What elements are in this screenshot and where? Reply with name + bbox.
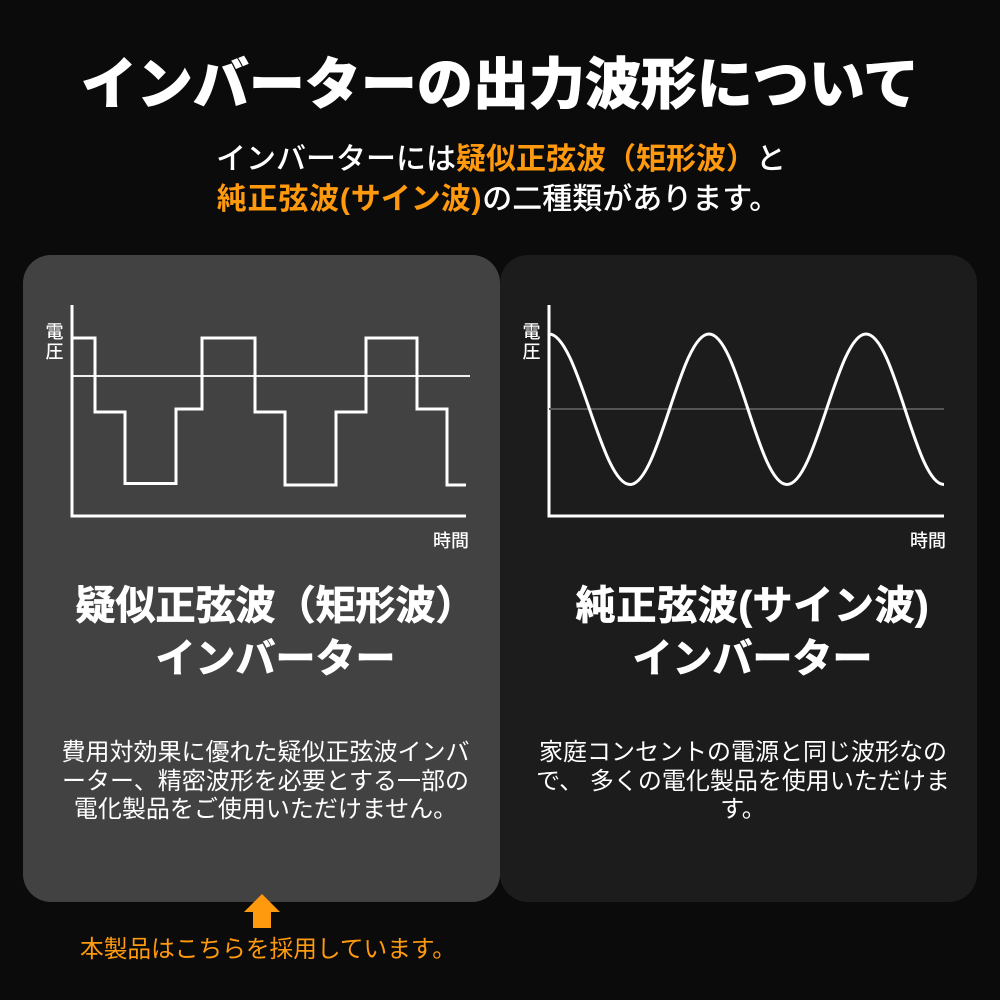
axis label: time right: 時間 <box>910 531 946 551</box>
heading: modified sine wave <box>76 584 476 681</box>
heading: pure sine wave: インバーター <box>632 637 872 681</box>
body text: modified sine wave: 費用対効果に優れた疑似正弦波インバ <box>62 739 470 766</box>
body text: modified sine wave: ーター、精密波形を必要とする一部の <box>62 768 469 794</box>
body text: pure sine wave: す。 <box>720 796 766 823</box>
title: インバーターの出力波形について <box>81 53 919 116</box>
heading: pure sine wave: 純正弦波(サイン波) <box>576 584 929 628</box>
body text: pure sine wave: 家庭コンセントの電源と同じ波形なの <box>539 739 947 766</box>
heading: modified sine wave: 疑似正弦波（矩形波） <box>76 584 476 628</box>
axis label: voltage right <box>522 322 540 362</box>
panel: modified sine wave inverter <box>23 255 500 902</box>
axis label: voltage left <box>46 322 64 362</box>
heading: pure sine wave <box>576 584 929 681</box>
panel: pure sine wave inverter <box>500 255 977 902</box>
axis label: voltage right: 電 <box>522 322 540 342</box>
subtitle: インバーターには疑似正弦波（矩形波）と <box>216 143 786 176</box>
body text: modified sine wave <box>62 739 470 823</box>
body text: pure sine wave: で、 多くの電化製品を使用いただけま <box>536 768 950 794</box>
axis label: voltage right: 圧 <box>522 342 540 362</box>
callout: this product uses this type: 本製品はこちらを採用しています。 <box>80 937 456 963</box>
body text: modified sine wave: 電化製品をご使用いただけません。 <box>74 796 457 823</box>
axis label: time left: 時間 <box>433 531 469 551</box>
axis label: voltage left: 圧 <box>46 342 64 362</box>
heading: modified sine wave: インバーター <box>156 637 396 681</box>
subtitle: 純正弦波(サイン波)の二種類があります。 <box>217 183 779 216</box>
subtitle <box>216 143 786 216</box>
body text: pure sine wave <box>536 739 950 823</box>
axis label: voltage left: 電 <box>46 322 64 342</box>
